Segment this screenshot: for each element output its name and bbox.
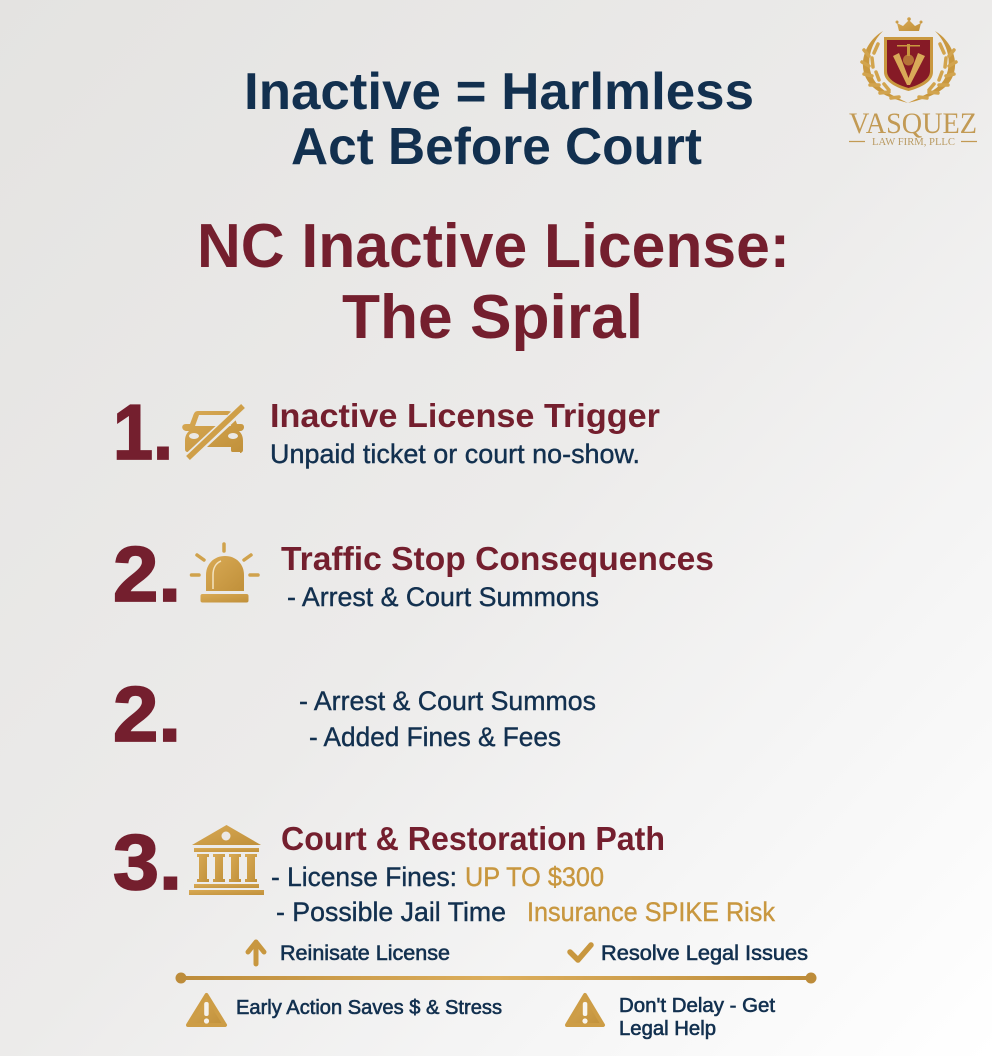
- logo wordmark: VASQUEZ: [849, 107, 977, 140]
- step 2: traffic stop consequences: [113, 530, 714, 618]
- label: Legal Help: [619, 1018, 716, 1040]
- label: [619, 995, 775, 1040]
- icon: courthouse: [189, 825, 264, 895]
- icon: up arrow: [248, 942, 264, 964]
- penalty lines: - Added Fines & Fees: [309, 722, 561, 752]
- icon: siren: [192, 544, 258, 602]
- timeline divider: [176, 972, 816, 984]
- repeated step 2: penalties: [113, 670, 596, 758]
- penalty lines: - Arrest & Court Summos: [299, 686, 596, 716]
- callout: early action: [188, 995, 502, 1025]
- logo: Vasquez Law Firm: LAW FIRM, PLLC: [872, 137, 955, 148]
- jail and insurance line: Insurance SPIKE Risk: [527, 897, 775, 927]
- step 1 heading: Inactive License Trigger: [270, 397, 660, 434]
- number 1: 1.: [113, 388, 173, 476]
- icon: warning triangle: [188, 995, 225, 1025]
- step 3: court and restoration path: [113, 818, 775, 927]
- heading: NC Inactive License: NC Inactive License:: [197, 212, 790, 281]
- icon: crown: [896, 17, 922, 31]
- title: Inactive = Harmless: [244, 63, 754, 176]
- step 3 heading: Court & Restoration Path: [281, 820, 665, 857]
- icon: check mark: [570, 945, 591, 960]
- callout: don't delay: [567, 995, 775, 1040]
- label: Reinisate License: [280, 942, 450, 965]
- icon: shield: [884, 37, 933, 91]
- icon: crossed-out car: [182, 406, 244, 460]
- logo: Vasquez Law Firm: [849, 17, 977, 148]
- heading: NC Inactive License: [197, 212, 790, 352]
- action: resolve legal issues: [570, 942, 808, 965]
- action: reinstate license: [248, 942, 450, 965]
- icon: laurel wreath: [862, 31, 956, 103]
- label: Early Action Saves $ & Stress: [236, 997, 502, 1019]
- label: Don't Delay - Get: [619, 995, 775, 1017]
- number 2 repeated: 2.: [113, 670, 181, 758]
- step 1 text: Unpaid ticket or court no-show.: [270, 439, 640, 469]
- title: Inactive = Harmless: Act Before Court: [291, 118, 702, 176]
- title: Inactive = Harmless: Inactive = Harlmless: [244, 63, 754, 121]
- jail and insurance line: [276, 897, 775, 927]
- license fines line: UP TO $300: [465, 862, 604, 892]
- step 2 heading: Traffic Stop Consequences: [281, 540, 714, 577]
- number 3: 3.: [113, 818, 182, 906]
- penalty lines: [299, 686, 596, 752]
- step 2 text: - Arrest & Court Summons: [287, 582, 599, 612]
- license fines line: - License Fines:: [271, 862, 457, 892]
- label: Resolve Legal Issues: [601, 942, 808, 965]
- license fines line: [271, 862, 604, 892]
- jail and insurance line: - Possible Jail Time: [276, 897, 506, 927]
- icon: warning triangle: [567, 995, 603, 1025]
- heading: NC Inactive License: The Spiral: [342, 283, 643, 352]
- step 1: inactive license trigger: [113, 388, 660, 476]
- number 2: 2.: [113, 530, 181, 618]
